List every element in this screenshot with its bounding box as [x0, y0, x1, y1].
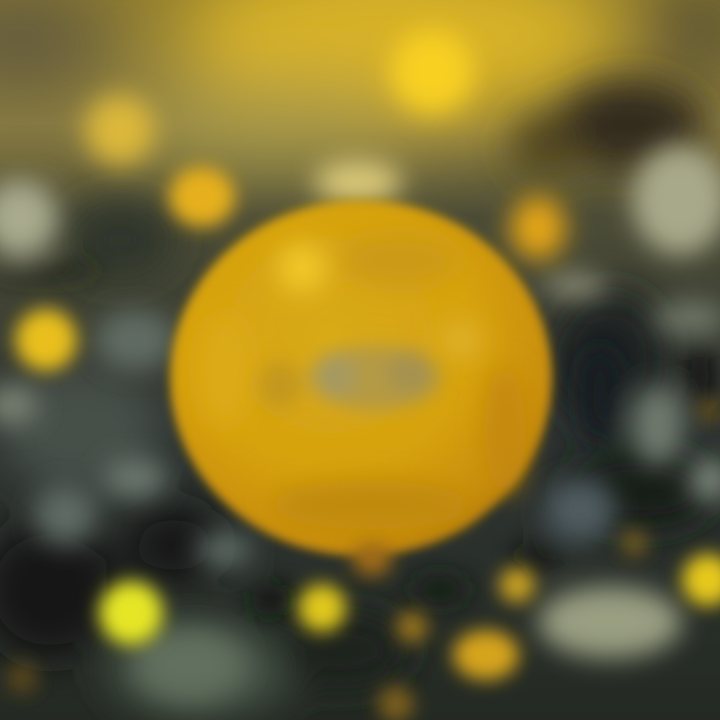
bokeh: above coin — [314, 160, 402, 204]
dark cloud upper right — [511, 79, 705, 177]
bokeh: bottom — [453, 630, 519, 680]
bokeh: dim amber right — [620, 529, 648, 557]
coin disc — [170, 200, 552, 556]
bokeh: top right — [390, 30, 474, 114]
rocky foreground: pale and dark blurred stones — [0, 145, 720, 715]
bokeh: below coin right — [499, 567, 535, 603]
bokeh: bottom left — [99, 581, 163, 645]
bokeh: dim amber left — [6, 662, 38, 694]
bokeh: upper left — [169, 167, 235, 227]
bokeh: small amber — [396, 611, 428, 643]
coin highlights and shading — [197, 234, 525, 529]
coin tip — [352, 540, 392, 576]
bokeh: bottom centre — [298, 584, 346, 632]
bokeh: top left — [85, 95, 155, 165]
large golden coin — [170, 200, 552, 576]
bokeh: dim amber edge — [698, 398, 720, 422]
coin central emblem — [258, 346, 441, 410]
bokeh: dim amber bottom — [378, 686, 414, 720]
bokeh: bottom right edge — [682, 554, 720, 606]
bokeh: right of coin — [510, 196, 566, 260]
bokeh: far left — [15, 309, 77, 371]
